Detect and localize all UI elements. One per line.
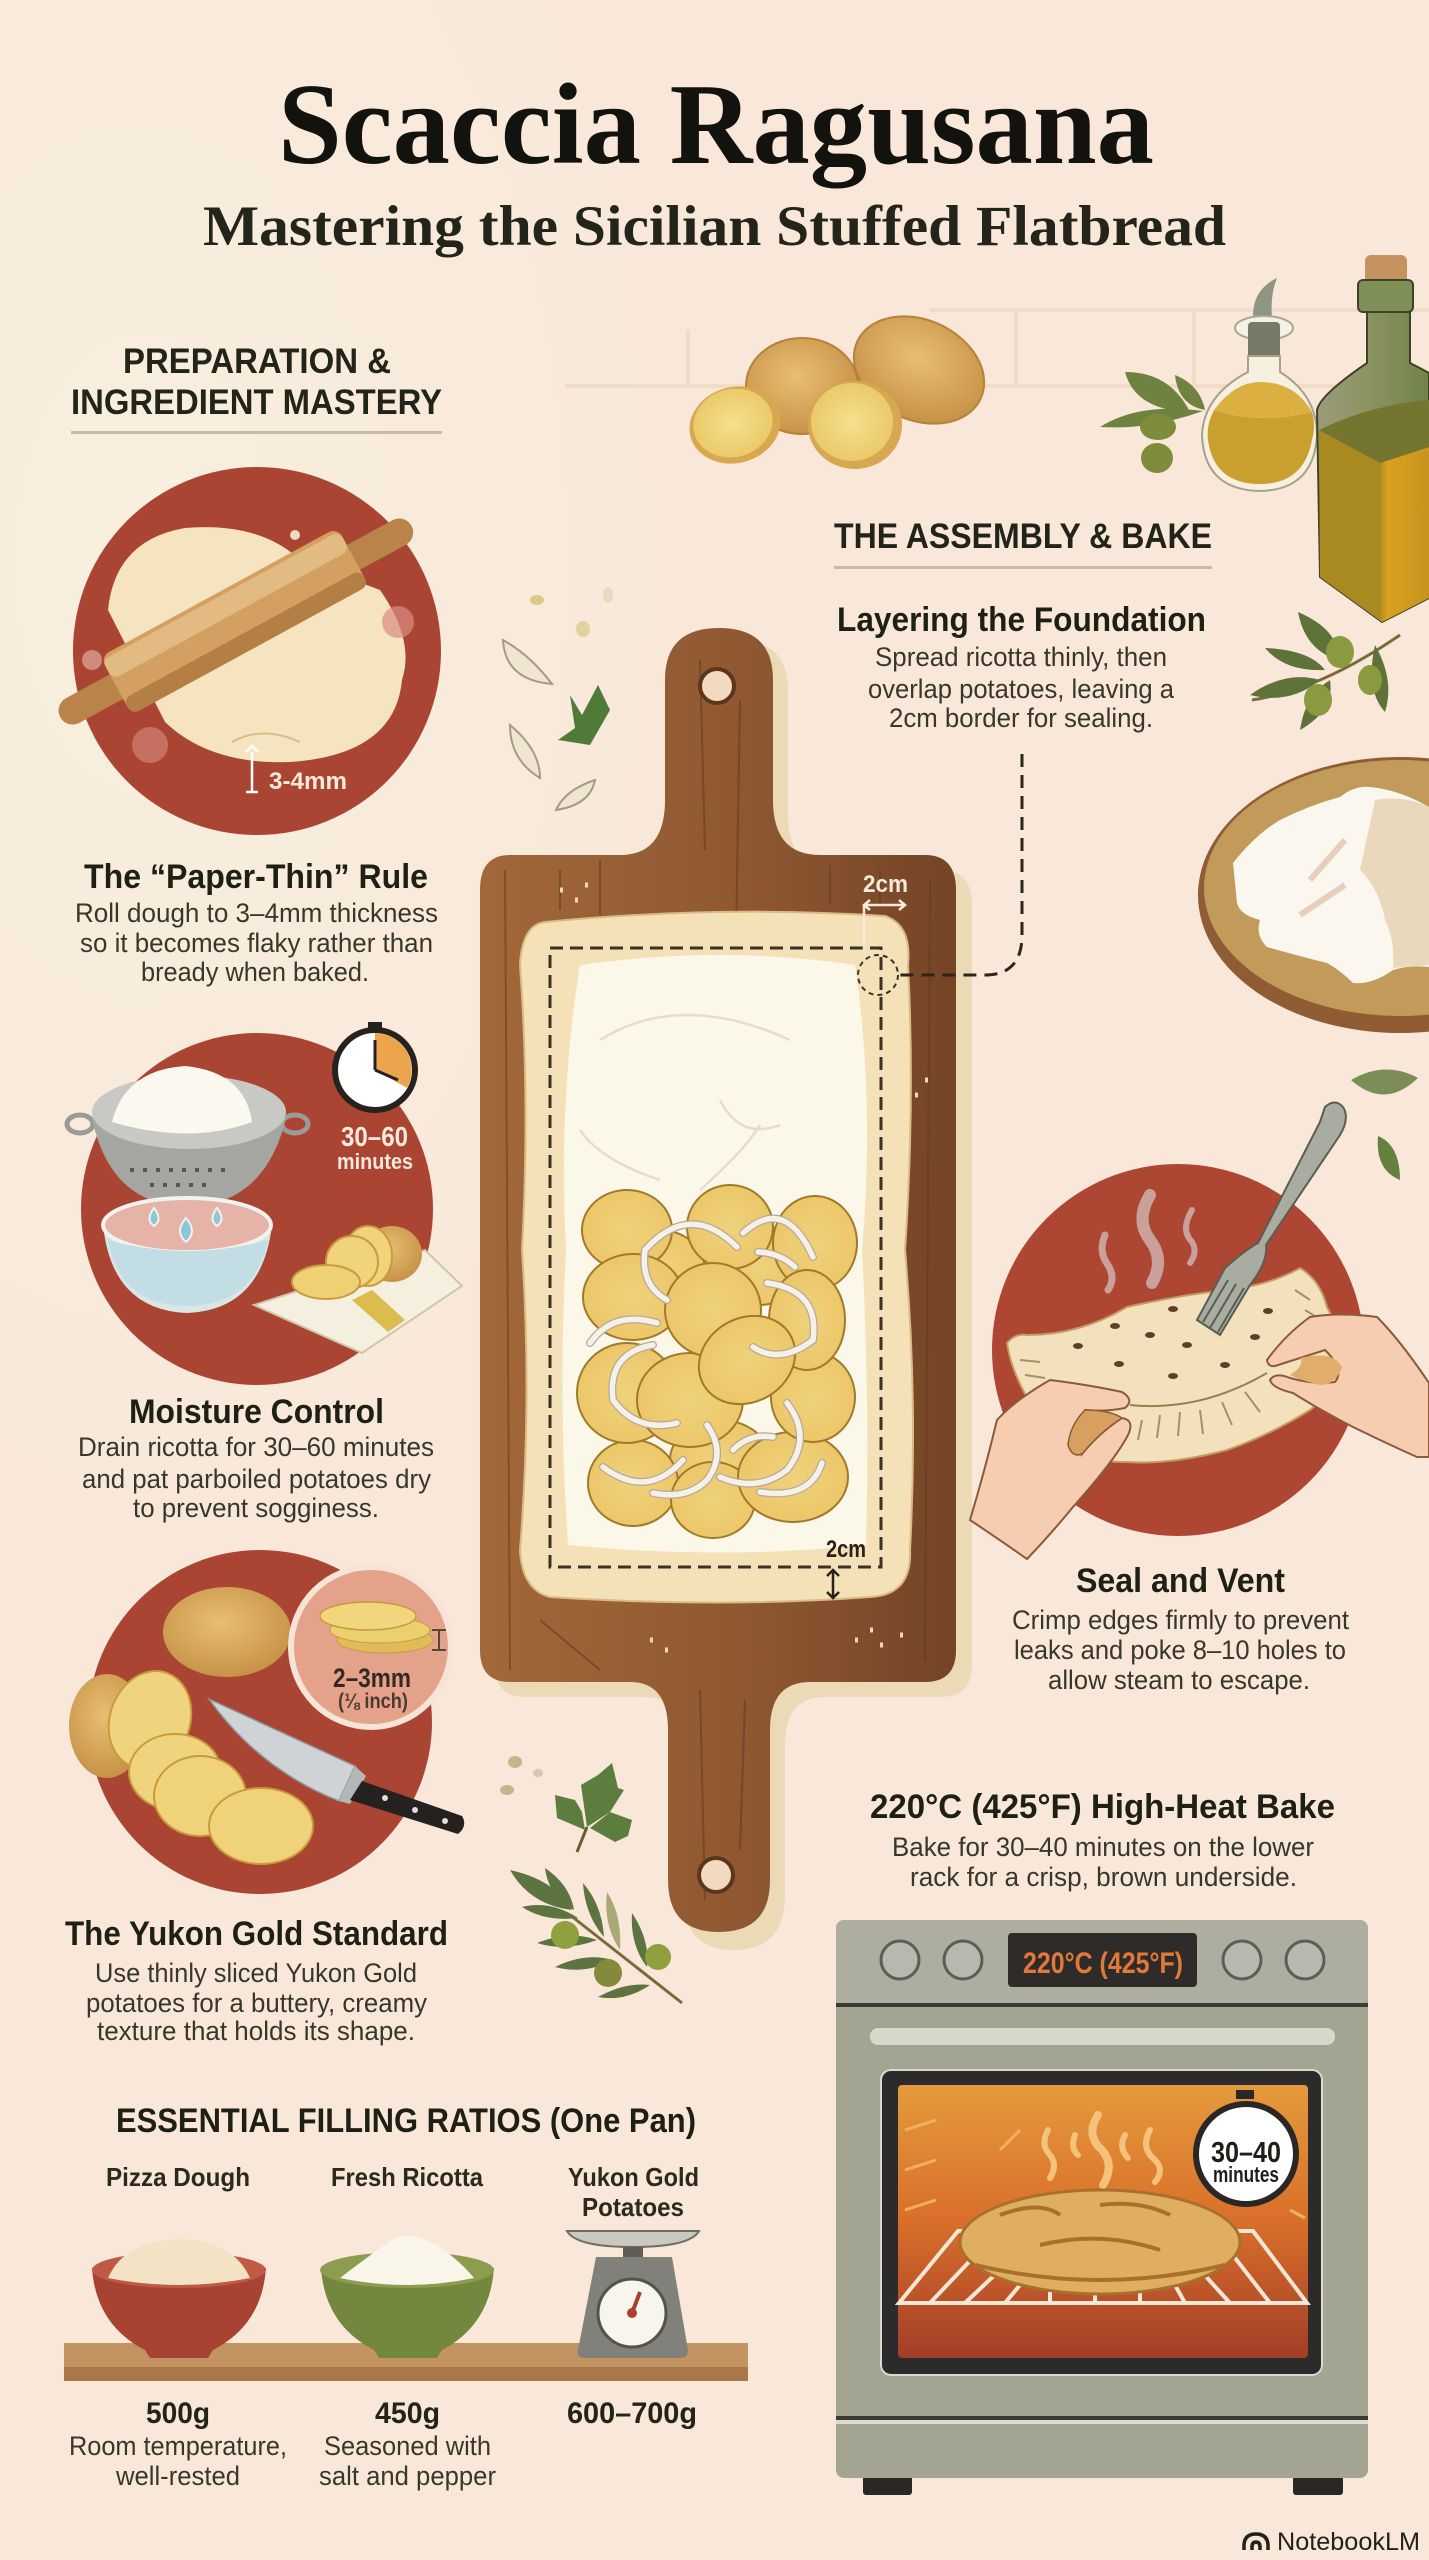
text: seal and vent: allow steam to escape. [1048,1665,1310,1695]
text: yukon gold standard: Use thinly sliced Yukon Gold [95,1958,417,1988]
oven display [1008,1933,1197,1987]
panel: oven [836,1920,1368,2495]
icon: hands [970,1314,1429,1559]
value: 500g: Room temperature, [69,2431,287,2461]
text: paper-thin rule: bready when baked. [141,957,369,987]
text: yukon gold standard: potatoes for a buttery, creamy [86,1988,427,2018]
label: 2cm bottom [826,1536,866,1598]
text: paper-thin rule: so it becomes flaky rather than [80,928,433,958]
heading: preparation [71,342,442,434]
icon and label: NotebookLM: NotebookLM [1277,2528,1420,2556]
text: moisture control: Drain ricotta for 30–60 minutes [78,1432,434,1462]
icon: stopwatch [335,1022,415,1110]
label: yukon gold potatoes: Potatoes [582,2192,684,2222]
icon: olive sprig [1100,372,1205,473]
icon: towel with potato slices [254,1226,462,1353]
icon: calzone [1007,1268,1343,1462]
label: 30-60 minutes [337,1121,413,1174]
icon: lower olive branch [510,1868,682,2003]
icon: olive oil bottle [1317,255,1429,622]
timer badge: minutes [1213,2162,1279,2187]
icon: olive branch [1250,612,1400,730]
dough [520,912,913,1602]
baked scaccia [960,2190,1240,2294]
timer badge [1196,2090,1296,2204]
text: moisture control: to prevent sogginess. [133,1493,379,1523]
text: paper-thin rule [75,858,438,987]
label: yukon gold potatoes: Yukon Gold [568,2162,699,2192]
callout: slice thickness [291,1567,451,1727]
value: 450g: Seasoned with [324,2431,491,2461]
onion slices [590,1219,822,1495]
text: high-heat bake: Bake for 30–40 minutes on the lower [892,1832,1314,1862]
heading: assembly and bake: THE ASSEMBLY & BAKE [834,517,1212,556]
label: yukon gold potatoes [568,2162,699,2222]
icon: knife [209,1699,464,1834]
text: seal and vent: Seal and Vent [1076,1562,1285,1600]
label: fresh ricotta: Fresh Ricotta [331,2162,483,2192]
icon: rolling pin [44,496,427,745]
text: high-heat bake: rack for a crisp, brown underside. [910,1862,1297,1892]
icon: colander with ricotta [67,1066,308,1207]
dashed border [550,948,898,1567]
panel: moisture control illustration [67,1022,462,1385]
label: 2cm top [863,871,908,950]
label: 2cm top: 2cm [863,871,908,898]
icon: lower parsley and seeds [500,1756,632,1852]
text: paper-thin rule: The “Paper-Thin” Rule [84,858,428,896]
icon: dough bowl [92,2239,266,2358]
icon: potatoes [681,296,1002,474]
text: layering the foundation: 2cm border for sealing. [889,703,1153,733]
heading: preparation: PREPARATION & [123,342,391,381]
shelf [64,2343,748,2381]
label: 2cm bottom: 2cm [826,1536,866,1563]
icon: flour bowl [1198,757,1429,1033]
text: paper-thin rule: Roll dough to 3–4mm thickness [75,898,438,928]
ricotta layer [562,955,867,1552]
heading: preparation: INGREDIENT MASTERY [71,383,442,422]
callout: slice thickness: 2–3mm [333,1663,411,1693]
text: moisture control: Moisture Control [129,1393,384,1431]
text: yukon gold standard: The Yukon Gold Standard [65,1915,448,1953]
value: 500g: 500g [146,2397,210,2430]
panel: seal and vent illustration [970,1102,1429,1559]
text: layering the foundation: Spread ricotta thinly, then [875,642,1167,672]
text: moisture control [78,1393,434,1523]
label: pizza dough: Pizza Dough [106,2162,250,2192]
panel: cutting board [480,628,972,1950]
icon: water bowl with drops [103,1198,272,1313]
value: 450g [319,2397,496,2491]
oven display: 220°C (425°F) [1023,1947,1183,1980]
oven rack [899,2231,1307,2303]
subtitle: Mastering the Sicilian Stuffed Flatbread [203,195,1226,258]
icon: fork [1197,1102,1346,1335]
timer badge: 30–40 [1211,2137,1281,2169]
value: 600-700g: 600–700g [567,2397,697,2430]
label: 3-4mm: 3-4mm [269,768,347,795]
panel: paper-thin illustration [44,467,441,835]
label: 30-60 minutes: 30–60 [341,1121,408,1152]
potato slices [577,1185,857,1538]
icon: ricotta bowl [320,2236,494,2358]
heading: filling ratios: ESSENTIAL FILLING RATIOS (One Pan) [116,2102,696,2140]
icon: oil cruet [1202,278,1317,491]
text: high-heat bake: 220°C (425°F) High-Heat Bake [870,1788,1335,1826]
heat waves [1044,2115,1160,2185]
callout: slice thickness: (⅛ inch) [338,1690,408,1713]
icon: garlic cloves and parsley [503,587,613,810]
title: Scaccia Ragusana [278,61,1154,188]
text: seal and vent: leaks and poke 8–10 holes to [1014,1635,1346,1665]
chart: filling ratios [64,2162,748,2491]
value: 450g: salt and pepper [319,2461,496,2491]
text: yukon gold standard: texture that holds its shape. [97,2016,415,2046]
oven window [881,2070,1322,2375]
value: 500g: well-rested [115,2461,240,2491]
value: 500g [69,2397,287,2491]
text: layering the foundation [837,601,1206,733]
icon: kitchen scale [567,2231,699,2358]
text: seal and vent [1012,1562,1349,1695]
text: seal and vent: Crimp edges firmly to prevent [1012,1605,1349,1635]
icon: small leaves [1351,1069,1418,1180]
text: high-heat bake [870,1788,1335,1892]
label: 30-60 minutes: minutes [337,1149,413,1174]
panel: yukon gold illustration [69,1550,464,1894]
label: 3-4mm [246,746,347,795]
text: yukon gold standard [65,1915,448,2046]
text: layering the foundation: Layering the Foundation [837,601,1206,639]
text: layering the foundation: overlap potatoes, leaving a [868,674,1175,704]
arrow: dashed leader [900,754,1022,975]
icon: steam [1102,1195,1195,1290]
oven knobs [881,1941,1324,1979]
text: moisture control: and pat parboiled potatoes dry [82,1464,431,1494]
value: 450g: 450g [375,2397,440,2430]
